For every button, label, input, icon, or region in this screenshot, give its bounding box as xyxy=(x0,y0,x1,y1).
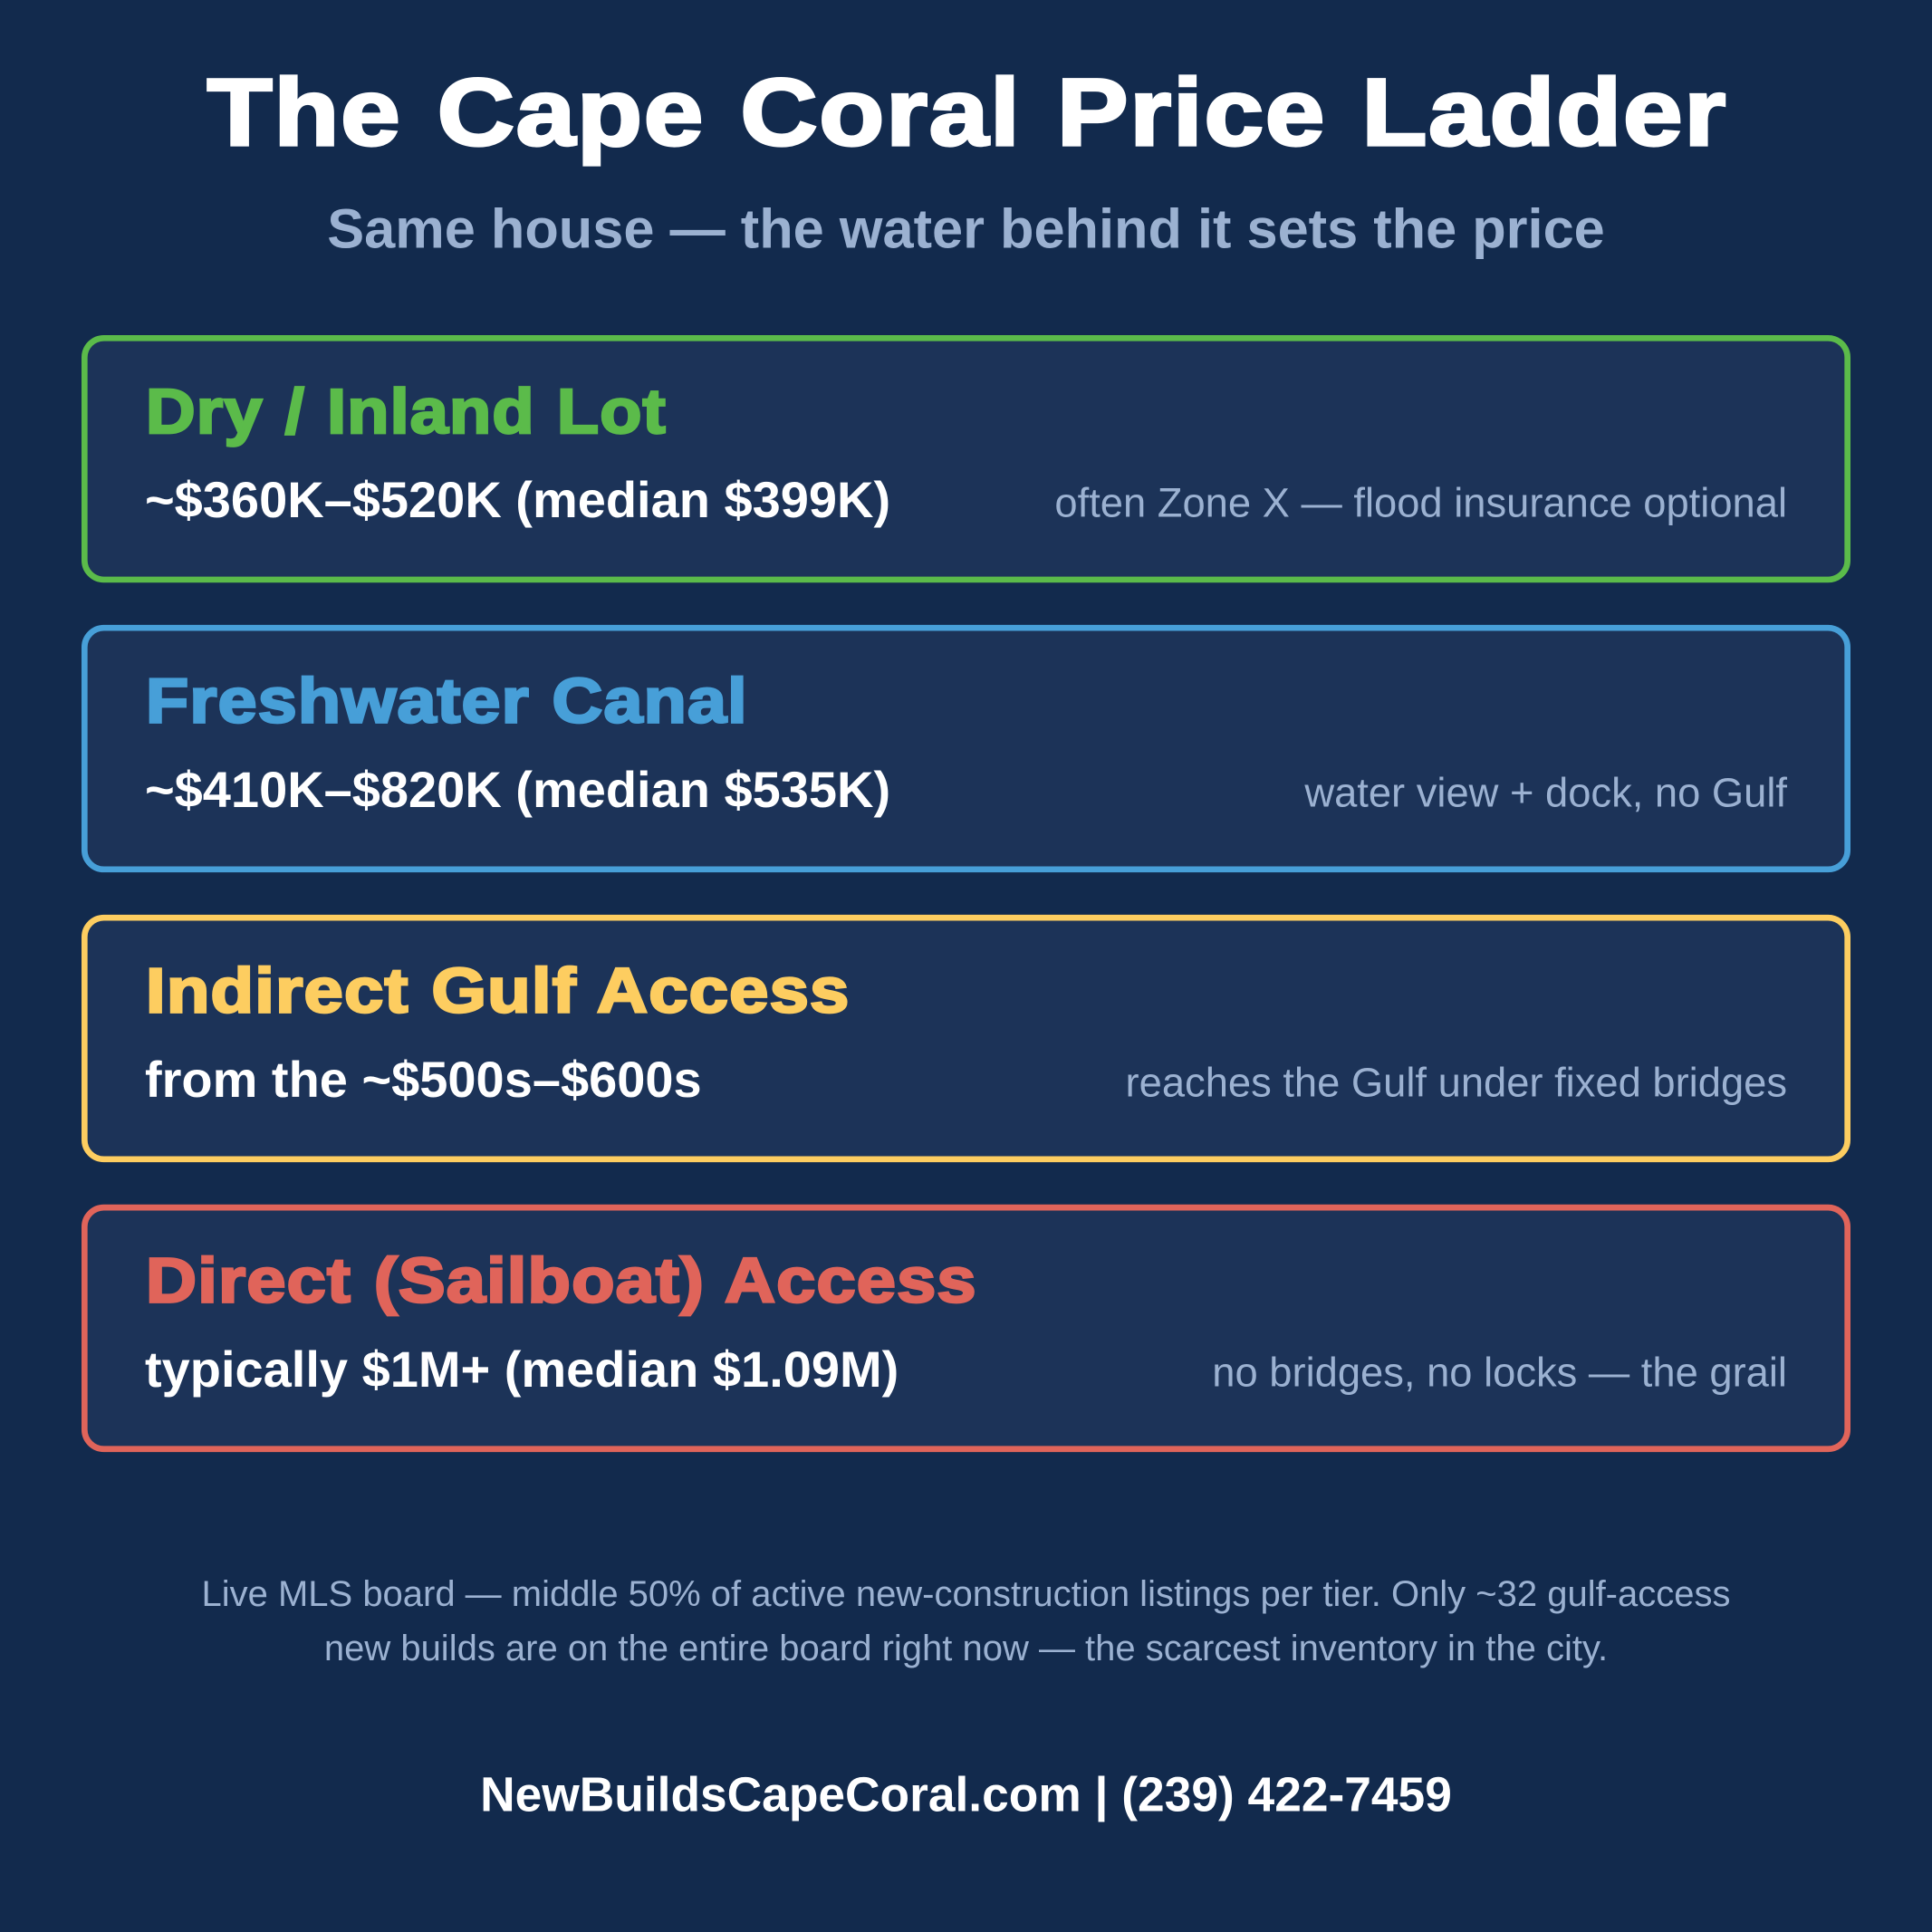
panel: freshwater canal xyxy=(84,628,1848,870)
price: freshwater canal: ~$410K–$820K (median $535K) xyxy=(145,761,890,818)
subtitle: Same house — the water behind it sets the price xyxy=(327,197,1605,259)
note: dry / inland lot: often Zone X — flood insurance optional xyxy=(1054,480,1787,526)
panel: direct sailboat access xyxy=(84,1207,1848,1449)
panel: dry / inland lot xyxy=(84,338,1848,580)
note: freshwater canal: water view + dock, no Gulf xyxy=(1303,770,1787,816)
note: indirect gulf access: reaches the Gulf under fixed bridges xyxy=(1126,1059,1787,1105)
heading: direct sailboat access: Direct (Sailboat) Access xyxy=(146,1245,977,1316)
note: direct sailboat access: no bridges, no locks — the grail xyxy=(1212,1349,1787,1395)
price: direct sailboat access: typically $1M+ (median $1.09M) xyxy=(145,1341,899,1398)
panel: indirect gulf access xyxy=(84,918,1848,1159)
footnote: Live MLS board — middle 50% of active new-construction listings per tier. Only ~32 gulf-access xyxy=(202,1574,1730,1614)
title: The Cape Coral Price Ladder xyxy=(207,60,1727,166)
footnote xyxy=(202,1574,1730,1668)
price: indirect gulf access: from the ~$500s–$600s xyxy=(145,1051,702,1108)
price: dry / inland lot: ~$360K–$520K (median $399K) xyxy=(145,471,890,528)
contact line: NewBuildsCapeCoral.com | (239) 422-7459 xyxy=(480,1769,1452,1823)
heading: dry / inland lot: Dry / Inland Lot xyxy=(146,376,667,447)
heading: indirect gulf access: Indirect Gulf Access xyxy=(146,956,851,1026)
footnote: new builds are on the entire board right now — the scarcest inventory in the city. xyxy=(324,1629,1608,1668)
heading: freshwater canal: Freshwater Canal xyxy=(146,666,748,736)
